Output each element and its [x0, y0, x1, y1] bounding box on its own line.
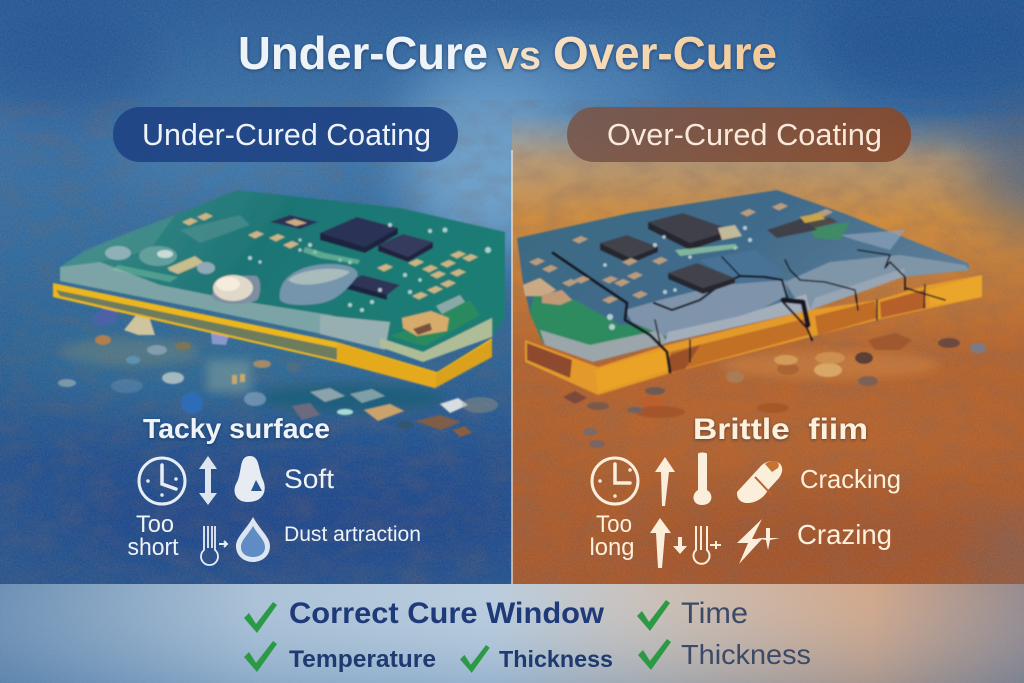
icon: up-down arrow: [199, 456, 217, 505]
debris under left board: [58, 304, 498, 437]
board pcb corner: [380, 300, 492, 362]
brittle board top surface: [517, 190, 970, 362]
background: orange right side: [512, 0, 1024, 591]
check: temperature: [244, 641, 277, 672]
pill heading: Under-Cured Coating: Under-Cured Coating: [142, 117, 431, 152]
coated board top surface: [60, 190, 505, 362]
check: correct cure window: [244, 602, 277, 633]
label: Too short: short: [128, 534, 179, 561]
light dots on right board: [603, 226, 752, 330]
label: Dust attraction: Dust artraction: [284, 523, 421, 546]
illustration: under-cured circuit board: [53, 190, 505, 437]
label: Cracking: Cracking: [800, 464, 901, 494]
icon: cracked pill: [737, 461, 782, 503]
icon: solid thermometer: [693, 452, 711, 505]
label: Too long: [590, 511, 634, 561]
solder pads on left board: [168, 213, 478, 314]
label: Thickness: Thickness: [499, 646, 613, 672]
chips on left board: [270, 215, 433, 300]
tacky droplets: [105, 246, 358, 305]
icon: clock: [139, 458, 185, 504]
icon: clock: [592, 458, 638, 504]
bottom strip background: [0, 584, 1024, 683]
pill heading: Under-Cured Coating: [113, 107, 458, 162]
icon: long up arrow with small down arrow: [650, 518, 687, 568]
cracks in the coating: [553, 250, 945, 372]
tan pads on right board: [523, 203, 833, 305]
left panel labels and icons: [128, 413, 421, 565]
label: Soft: Soft: [284, 464, 335, 494]
pill heading: Over-Cured Coating: [567, 107, 911, 162]
title: [238, 27, 777, 79]
title: Under-Cure: [238, 27, 488, 79]
check: thickness right: [638, 639, 671, 670]
light dots on left board: [112, 223, 491, 312]
heading: Correct Cure Window: Correct Cure Window: [289, 597, 605, 630]
icon: water drop: [236, 517, 270, 562]
title: vs: [497, 34, 541, 78]
icon: thermometer with plus: [694, 526, 721, 564]
center divider: [511, 150, 513, 584]
icon: lightning bolt: [737, 519, 780, 564]
cracked orange substrate: [525, 275, 982, 395]
label: Too short: Too: [136, 511, 174, 538]
label: Too short: [128, 511, 179, 561]
label: Time: Time: [681, 597, 748, 630]
icon: thermometer with plus: [201, 526, 227, 565]
label: Too long: Too: [596, 511, 632, 538]
debris under right board: [563, 333, 986, 448]
yellow substrate: [53, 283, 492, 388]
panel: correct cure window: [244, 597, 811, 673]
icon: soft pear: [234, 456, 265, 502]
background: blue field: [0, 0, 1024, 430]
label: Tacky surface: Tacky surface: [143, 413, 330, 444]
label: Temperature: Temperature: [289, 646, 436, 673]
icon: up arrow: [655, 457, 675, 506]
label: Thickness right: Thickness: [681, 639, 811, 670]
title: Over-Cure: [553, 27, 777, 79]
check: time: [637, 600, 670, 631]
illustration: over-cured circuit board: [517, 190, 986, 448]
painterly mottling: [0, 100, 1024, 584]
chips on right board: [600, 213, 838, 294]
label: Brittle film: Brittle fiim: [693, 413, 868, 446]
check: thickness: [460, 645, 490, 673]
right panel labels and icons: [590, 413, 901, 568]
label: Crazing: Crazing: [797, 519, 892, 550]
label: Too long: long: [590, 534, 634, 561]
pill heading: Over-Cured Coating: Over-Cured Coating: [607, 117, 882, 152]
